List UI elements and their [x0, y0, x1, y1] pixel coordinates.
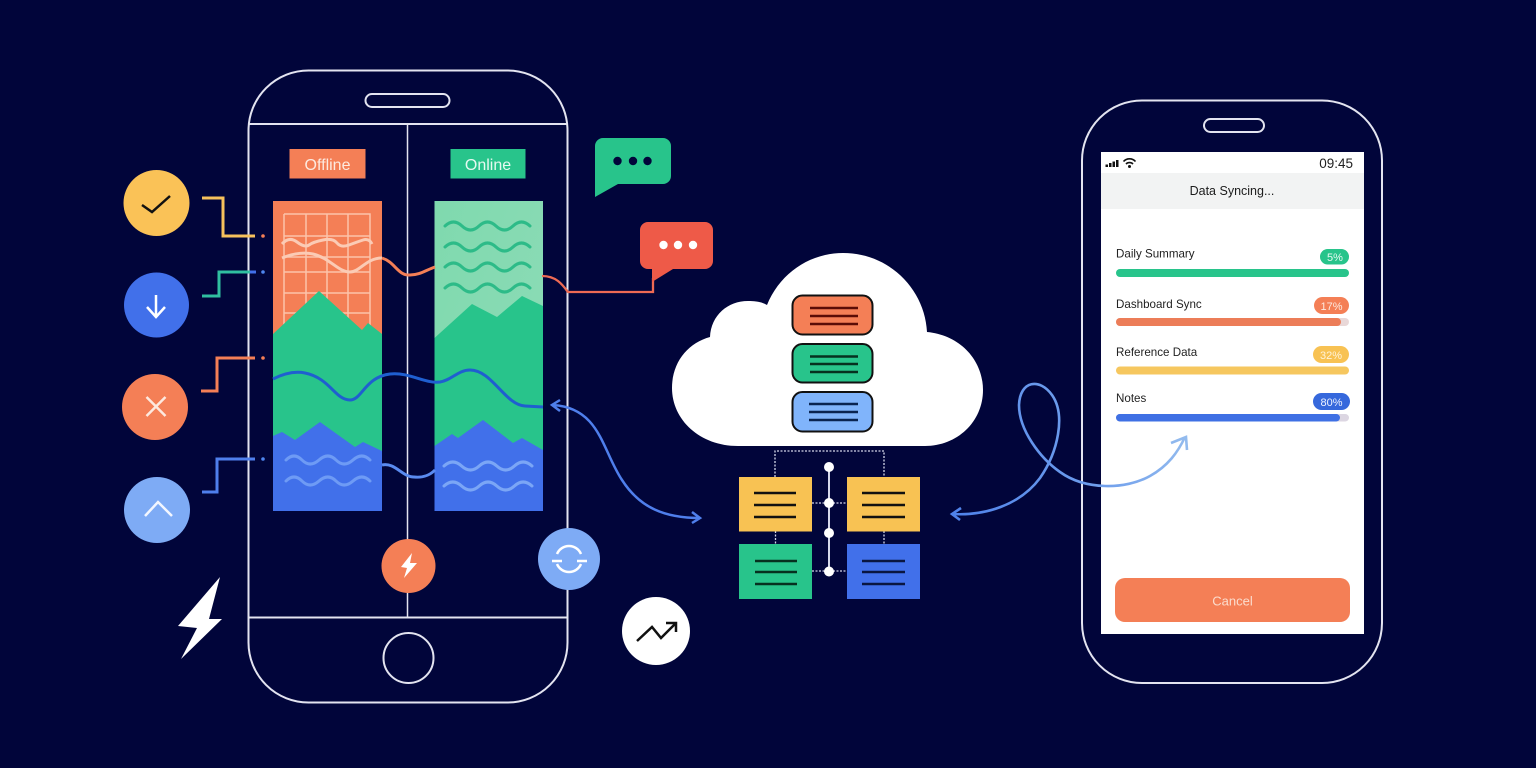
screen header: Data Syncing...	[1190, 184, 1274, 198]
status icon: check	[124, 170, 265, 238]
icon: lightning bolt	[178, 577, 222, 659]
label: Offline: Offline	[305, 157, 351, 174]
progress row: Daily Summary: 5%	[1327, 252, 1343, 264]
label: Offline	[290, 149, 366, 178]
status icon: download arrow	[124, 270, 265, 338]
cloud card: coral	[792, 296, 872, 334]
connector network	[775, 451, 884, 576]
data flow line: blue across columns	[273, 370, 543, 407]
panel: offline column	[273, 201, 382, 511]
arrow: phone to sync hub	[552, 400, 700, 523]
arrow: looping sync between hub and phone	[952, 384, 1187, 520]
screen header	[1101, 173, 1364, 209]
data flow line: lower blue wave	[382, 465, 435, 477]
cloud card: green	[792, 344, 872, 382]
label: Online: Online	[465, 157, 511, 174]
progress row: Notes	[1116, 392, 1350, 422]
status bar	[1106, 156, 1353, 171]
chat bubble: red	[640, 222, 713, 282]
progress row: Dashboard Sync: 17%	[1320, 301, 1343, 313]
status icon: cross	[122, 356, 265, 440]
data block: green	[739, 544, 812, 599]
chat bubble: green	[595, 138, 671, 197]
icon: sync button	[538, 528, 600, 590]
progress row: Reference Data: 32%	[1320, 350, 1342, 362]
panel: online column	[434, 201, 543, 511]
cloud	[672, 253, 983, 446]
status bar: 09:45	[1319, 156, 1353, 171]
progress row: Dashboard Sync: Dashboard Sync	[1116, 298, 1202, 311]
label: Online	[450, 149, 526, 178]
status icon: upload chevron	[124, 457, 265, 543]
icon: coral bolt button	[382, 539, 436, 593]
cancel button: Cancel	[1212, 594, 1253, 608]
progress row: Notes: Notes	[1116, 392, 1146, 405]
progress row: Dashboard Sync	[1116, 297, 1349, 326]
progress row: Daily Summary: Daily Summary	[1116, 248, 1195, 260]
right phone outline	[1082, 100, 1382, 683]
progress row: Notes: 80%	[1320, 397, 1343, 409]
left phone outline	[248, 70, 568, 702]
icon: trend chart button	[622, 597, 690, 665]
data block: yellow right	[847, 477, 920, 532]
data block: yellow left	[739, 477, 812, 532]
data block: blue	[847, 544, 920, 599]
progress row: Reference Data: Reference Data	[1116, 346, 1198, 359]
cancel button	[1115, 578, 1350, 622]
phone screen	[1101, 152, 1364, 634]
cloud card: blue	[792, 392, 872, 432]
data flow line: coral across columns	[282, 253, 435, 275]
progress row: Daily Summary	[1116, 248, 1349, 277]
progress row: Reference Data	[1116, 346, 1349, 374]
connector: online column to red chat bubble	[542, 276, 653, 292]
